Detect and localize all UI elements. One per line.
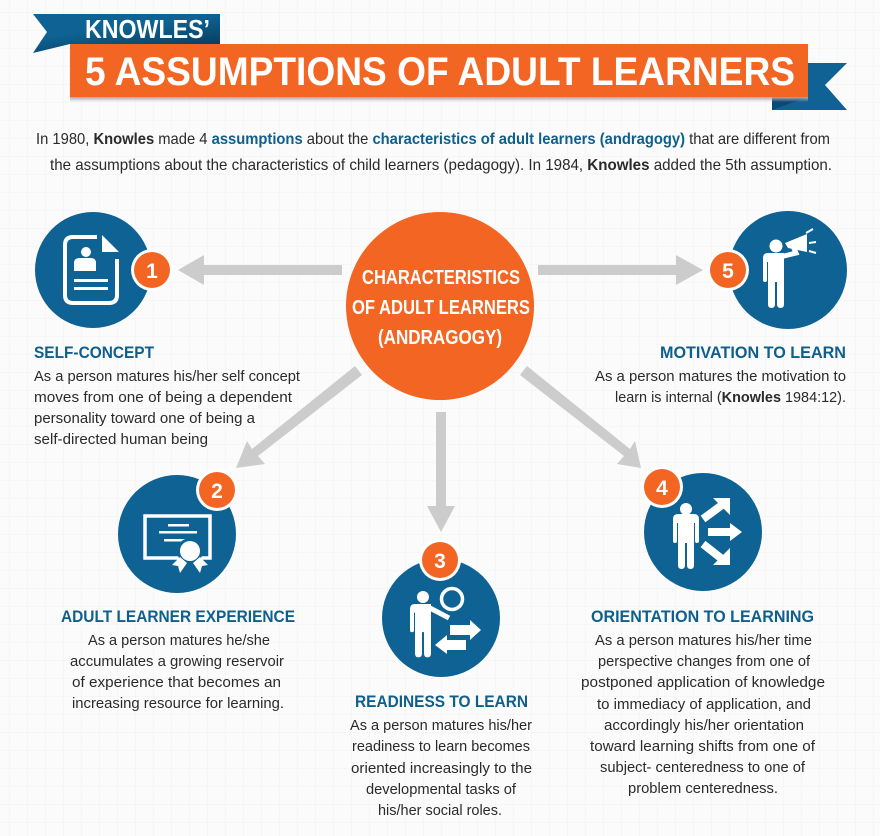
body text bbox=[581, 632, 825, 797]
panel: self-concept bbox=[34, 212, 301, 448]
icon: certificate bbox=[118, 475, 236, 593]
centre circle: CHARACTERISTICS bbox=[362, 267, 520, 289]
arrow to 5 bbox=[538, 255, 703, 285]
arrow to 2 bbox=[236, 366, 362, 468]
body text: perspective changes from one of bbox=[598, 653, 811, 670]
body text: accordingly his/her orientation bbox=[604, 717, 804, 734]
body text: self-directed human being bbox=[34, 431, 208, 448]
body text: toward learning shifts from one of bbox=[590, 738, 816, 755]
body text bbox=[350, 717, 532, 819]
body text: his/her social roles. bbox=[378, 802, 502, 819]
body text: subject- centeredness to one of bbox=[600, 759, 806, 776]
badge 1: 1 bbox=[146, 260, 158, 283]
title banner bbox=[33, 14, 847, 110]
body text: As a person matures the motivation to bbox=[595, 368, 846, 385]
orange title bar bbox=[70, 44, 808, 97]
badge 2: 2 bbox=[211, 480, 223, 503]
badge 1 bbox=[131, 249, 173, 291]
icon: person with megaphone bbox=[729, 211, 847, 329]
intro text: In 1980, Knowles made 4 assumptions about the characteristics of adult learners (andragogy) that are different from bbox=[36, 131, 830, 148]
badge 4 bbox=[641, 466, 683, 508]
heading: MOTIVATION TO LEARN bbox=[660, 343, 846, 362]
body text: to immediacy of application, and bbox=[597, 696, 811, 713]
body text bbox=[70, 632, 284, 712]
body text bbox=[595, 368, 846, 406]
panel: adult learner experience bbox=[61, 469, 295, 712]
arrow to 3 bbox=[427, 412, 455, 532]
body text: developmental tasks of bbox=[366, 781, 517, 798]
heading: SELF-CONCEPT bbox=[34, 343, 155, 362]
heading: ORIENTATION TO LEARNING bbox=[591, 607, 814, 626]
badge 5 bbox=[707, 249, 749, 291]
ribbon: bottom right bbox=[772, 63, 847, 110]
badge 3 bbox=[419, 539, 461, 581]
centre circle: (ANDRAGOGY) bbox=[378, 327, 502, 349]
body text: readiness to learn becomes bbox=[352, 738, 530, 755]
centre circle: OF ADULT LEARNERS bbox=[352, 297, 530, 319]
badge 3: 3 bbox=[434, 550, 446, 573]
body text: As a person matures his/her self concept bbox=[34, 368, 301, 385]
ribbon: top left bbox=[33, 14, 220, 53]
body text: personality toward one of being a bbox=[34, 410, 256, 427]
panel: readiness to learn bbox=[350, 539, 532, 819]
body text: oriented increasingly to the bbox=[351, 760, 532, 777]
body text: postponed application of knowledge bbox=[581, 674, 825, 691]
heading: main title: 5 ASSUMPTIONS OF ADULT LEARNERS bbox=[85, 50, 795, 94]
intro text: the assumptions about the characteristics of child learners (pedagogy). In 1984, Knowles added the 5th assumption. bbox=[50, 157, 832, 174]
body text: problem centeredness. bbox=[628, 780, 778, 797]
arrow to 1 bbox=[178, 255, 342, 285]
body text: As a person matures he/she bbox=[88, 632, 270, 649]
icon: document with person bbox=[35, 212, 151, 328]
heading: ADULT LEARNER EXPERIENCE bbox=[61, 607, 295, 626]
heading: Knowles': KNOWLES’ bbox=[85, 14, 210, 44]
body text: accumulates a growing reservoir bbox=[70, 653, 284, 670]
body text: As a person matures his/her bbox=[350, 717, 532, 734]
arrow to 4 bbox=[520, 366, 641, 468]
centre circle bbox=[346, 212, 534, 400]
panel: motivation to learn bbox=[595, 211, 847, 406]
panel: orientation to learning bbox=[581, 466, 825, 797]
body text: moves from one of being a dependent bbox=[34, 389, 293, 406]
intro text bbox=[36, 131, 832, 174]
icon: person with magnifier and arrows bbox=[382, 559, 500, 677]
icon: person with three arrows bbox=[644, 473, 762, 591]
badge 4: 4 bbox=[656, 477, 668, 500]
badge 2 bbox=[196, 469, 238, 511]
body text: of experience that becomes an bbox=[72, 674, 281, 691]
body text: increasing resource for learning. bbox=[72, 695, 284, 712]
body text bbox=[34, 368, 301, 448]
body text: As a person matures his/her time bbox=[595, 632, 812, 649]
heading: READINESS TO LEARN bbox=[355, 692, 528, 711]
badge 5: 5 bbox=[722, 260, 734, 283]
body text: learn is internal (Knowles 1984:12). bbox=[615, 389, 846, 406]
arrows from centre bbox=[178, 255, 703, 532]
